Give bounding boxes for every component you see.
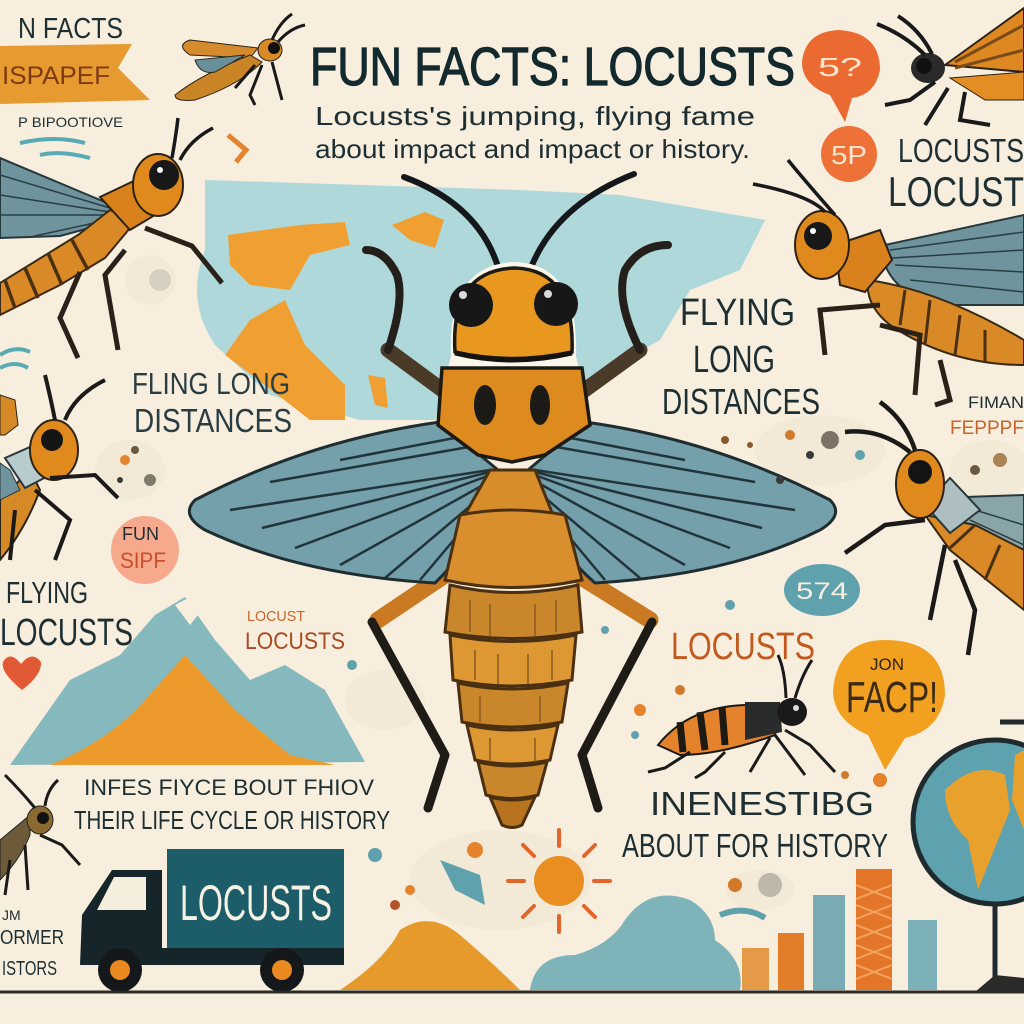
text block: interesting about: INENESTIBG [650,785,874,822]
beetle locust [648,655,835,778]
callout: fun fact: JON [870,655,904,674]
fun badge: SIPF [120,548,166,573]
label: locusts orange: LOCUSTS [671,626,815,668]
thorax spots [474,385,496,425]
label: small right fragment: FEPPPF [950,418,1024,439]
badge 574: 574 [796,578,848,605]
right upper locust [753,160,1024,405]
right top label [888,132,1024,215]
bottom left locust [0,775,80,895]
thorax [438,368,590,462]
top left banner [0,13,150,158]
text block: life cycle: THEIR LIFE CYCLE OR HISTORY [74,805,390,835]
scattered confetti [0,135,1007,918]
label: locust locusts [245,608,345,655]
top right locust [877,8,1024,125]
badge: 5P [831,140,867,170]
subtitle: Locusts's jumping, flying fame [315,101,755,131]
label: flying long distances left: DISTANCES [134,402,292,439]
badge [821,126,877,182]
label: small right fragment [950,393,1024,439]
label: flying long distances right: DISTANCES [662,381,820,422]
label: flying locusts: LOCUSTS [0,612,133,654]
callout badge: 5? [818,52,862,82]
paper mottling [95,255,1024,930]
text block: life cycle [74,775,390,835]
subtitle: about impact and impact or history. [315,134,750,164]
wasp fragment: left edge [0,395,18,435]
front legs [366,245,668,392]
label: flying locusts [0,575,133,654]
eyes [449,283,493,327]
ground line [0,990,1024,994]
map panel [197,180,765,420]
label: flying locusts: FLYING [6,575,88,610]
label: former history: ISTORS [2,958,57,980]
label: locust locusts: LOCUST [247,608,305,625]
right wing [528,422,836,583]
head and thorax halo [434,262,592,466]
label: former history [0,907,64,980]
callout: fun fact [833,640,945,770]
top left banner: ISPAPEF [2,62,110,90]
top left banner: P BIPOOTIOVE [18,114,123,130]
antennae [404,174,634,270]
icon: sun [508,830,610,932]
orange hill [340,921,520,990]
badge 574 [784,564,860,616]
bar chart [742,869,937,990]
text block: life cycle: INFES FIYCE BOUT FHIOV [84,775,374,800]
left wing [189,422,498,583]
left middle locust [0,375,118,560]
mountains [10,597,365,765]
label: flying long distances right: LONG [693,339,775,381]
icon: heart [3,656,41,690]
top left banner: N FACTS [18,13,123,45]
fun badge [111,516,179,584]
central locust [189,174,836,828]
title: FUN FACTS: LOCUSTS [310,37,795,97]
label: former history: ORMER [0,927,64,949]
text block: interesting about [622,785,888,864]
abdomen [445,470,582,828]
icon: truck: LOCUSTS [180,875,332,931]
label: small right fragment: FIMAN [968,393,1024,412]
fun badge: FUN [122,524,159,544]
icon: top small locust [175,14,305,105]
text block: interesting about: ABOUT FOR HISTORY [622,827,888,864]
teal hills [530,896,741,990]
right lower locust [845,402,1024,655]
label: former history: JM [2,907,21,923]
label: flying long distances left [132,366,292,439]
hind legs [372,575,652,808]
icon: globe [913,722,1024,992]
left upper locust [0,118,222,358]
callout: fun fact: FACP! [846,673,938,722]
label: flying long distances right: FLYING [680,292,795,334]
subtitle [315,101,755,164]
icon: truck [80,849,344,992]
callout badge [802,30,880,122]
head [455,268,572,358]
label: flying long distances right [662,292,820,422]
label: locust locusts: LOCUSTS [245,628,345,655]
label: flying long distances left: FLING LONG [132,366,290,401]
